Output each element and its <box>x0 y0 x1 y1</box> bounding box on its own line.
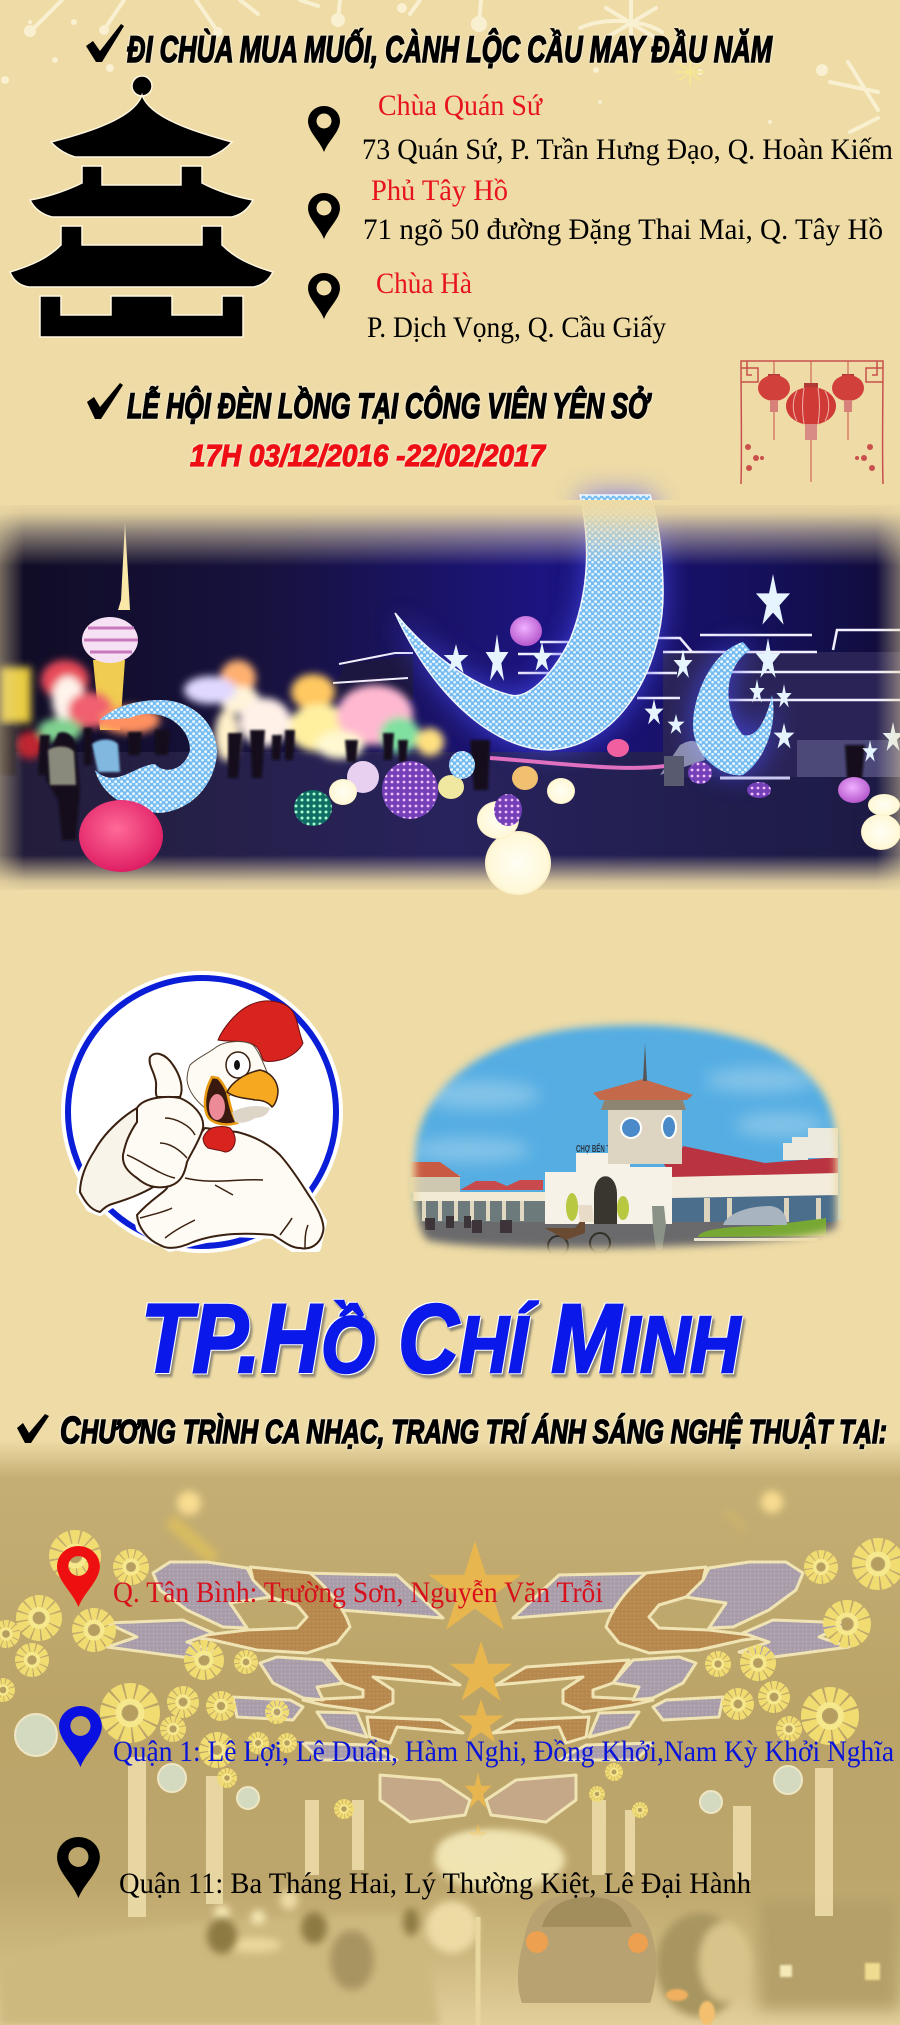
sub: left wing <box>413 1192 545 1201</box>
sub: cyclo <box>545 1205 610 1256</box>
sub: left roofs <box>460 1180 543 1190</box>
sub: left crescent <box>95 700 217 813</box>
sub: pedestrian <box>652 1206 666 1250</box>
title: TP.Ho Chi Minh: TP.HỒ CHÍ MINH <box>141 1284 742 1393</box>
sub: left arm <box>80 1108 155 1212</box>
sub: buildings <box>333 652 900 777</box>
sub: ground <box>414 1220 842 1254</box>
sub: building light lines <box>333 630 900 700</box>
text: Quan 11: Quận 11: Ba Tháng Hai, Lý Thường Kiệt, Lê Đại Hành <box>119 1867 751 1900</box>
sub: beard <box>232 1106 270 1123</box>
sub: sky <box>408 1019 842 1220</box>
sub: large crescent <box>395 495 663 750</box>
location list: Ho Chi Minh City <box>57 1546 894 1900</box>
sub: colored light clusters <box>0 660 444 761</box>
icon: check mark <box>17 1414 49 1443</box>
sub: tongue <box>209 1094 225 1120</box>
sub: road <box>0 1830 565 2025</box>
icon: lantern decoration <box>741 361 883 484</box>
sub: tower <box>82 522 138 730</box>
sub: spire <box>643 1043 647 1081</box>
sub: lawn <box>698 1218 826 1237</box>
sub: car window <box>542 1897 632 1927</box>
sub: clouds <box>410 1068 825 1162</box>
sub: right arcade <box>672 1195 838 1222</box>
address: 71 ngo 50: 71 ngõ 50 đường Đặng Thai Mai, Q. Tây Hồ <box>363 213 883 246</box>
label: Phu Tay Ho: Phủ Tây Hồ <box>371 174 508 207</box>
icon: check mark <box>86 24 124 62</box>
sub: left building roof <box>410 1162 461 1177</box>
sub: clock left <box>621 1118 641 1138</box>
sub: stars <box>428 1541 522 1846</box>
sub: flowers <box>0 1537 897 1816</box>
icon: red pin <box>57 1546 100 1607</box>
sub: gate arch <box>594 1176 617 1224</box>
fade into page background <box>0 1440 900 1478</box>
sub: head <box>187 1042 267 1108</box>
sub: right arcade piers <box>704 1198 821 1222</box>
sub: beak <box>227 1070 278 1107</box>
sub: tower roof <box>593 1079 693 1100</box>
sub: sticker halo <box>80 1132 323 1248</box>
sub: tower band <box>601 1100 686 1110</box>
sub: ribbons left <box>107 1562 470 1822</box>
sub: left arcade piers <box>422 1201 524 1221</box>
icon: pagoda <box>10 76 273 337</box>
sub: moon glow <box>395 495 773 775</box>
sub: fade edges <box>0 500 900 893</box>
sub: right apartments <box>783 1128 838 1160</box>
icon: pin 3 <box>308 273 340 319</box>
label: Chua Quan Su: Chùa Quán Sứ <box>378 89 544 122</box>
sub: wing lines <box>140 1178 308 1248</box>
illustration: Ben Thanh market <box>408 1019 842 1254</box>
sub: balloons <box>79 616 900 895</box>
sub: bushes at gate <box>566 1193 629 1221</box>
icon: pin 2 <box>308 193 340 239</box>
sub: fist fingers <box>127 1118 195 1178</box>
sub: right wing band <box>672 1173 838 1200</box>
icon: blue pin <box>59 1706 102 1767</box>
icon: pin 1 <box>308 106 340 152</box>
sub: shirts <box>48 740 120 785</box>
sub: eye <box>226 1052 250 1078</box>
sub: tail lights <box>666 1963 880 2025</box>
sub: small right crescent <box>693 642 773 775</box>
sub: tower <box>608 1108 682 1164</box>
sub: wattle <box>203 1126 235 1152</box>
sub: car <box>518 1893 656 2003</box>
location list: temples <box>308 89 893 344</box>
sub: thumb <box>150 1054 182 1097</box>
photo: lantern festival <box>0 495 900 895</box>
photo: street lights background <box>0 1440 900 2025</box>
sub: central block <box>545 1153 672 1224</box>
sub: light stars <box>444 574 900 762</box>
fireworks decoration <box>1 0 878 132</box>
sub: right roofs <box>664 1146 838 1177</box>
sub: road right shade <box>758 1897 900 2010</box>
sub: sidewalk <box>694 1238 818 1241</box>
sub: chest and lower wing <box>137 1128 323 1248</box>
icon: black pin <box>57 1837 100 1898</box>
sub: left arcade <box>413 1201 546 1222</box>
illustration: rooster in circle <box>61 971 343 1253</box>
sub: fist <box>123 1097 203 1187</box>
sub: far lights <box>438 1832 522 1868</box>
sub: street glow lights <box>170 1491 783 1560</box>
sub: riders <box>207 1908 751 2017</box>
sub: lower crowd <box>0 727 865 840</box>
sub: road lane line <box>476 1917 480 2025</box>
sub: round signs <box>15 1714 802 1813</box>
sub: pupil <box>234 1060 240 1070</box>
heading: le hoi den long: LỄ HỘI ĐÈN LỒNG TẠI CÔNG VIÊN YÊN SỞ <box>127 386 652 426</box>
label: Chua Ha: Chùa Hà <box>376 267 472 300</box>
sub: platform <box>490 739 790 786</box>
address: P. Dich Vong: P. Dịch Vọng, Q. Cầu Giấy <box>367 311 666 344</box>
sub: car <box>723 1206 787 1225</box>
date range: 17H 03/12/2016 -22/02/2017 <box>190 438 547 473</box>
icon: check mark <box>87 383 123 419</box>
sub: comb <box>218 1001 303 1062</box>
sub: car lights <box>526 1931 648 1953</box>
heading: le hoi den long <box>87 383 652 426</box>
sub: ribbons right <box>486 1562 849 1822</box>
sub: circle badge <box>61 971 343 1253</box>
sub: mouth <box>205 1077 237 1124</box>
sub: clock right <box>662 1116 676 1138</box>
sub: market sign: CHỢ BẾN THÀNH <box>576 1142 628 1155</box>
text: Tan Binh: Q. Tân Bình: Trường Sơn, Nguyễn Văn Trỗi <box>113 1576 603 1609</box>
sub: motorbikes <box>425 1216 512 1233</box>
sub: lit columns <box>128 1757 833 1917</box>
sub: left building <box>410 1175 460 1193</box>
